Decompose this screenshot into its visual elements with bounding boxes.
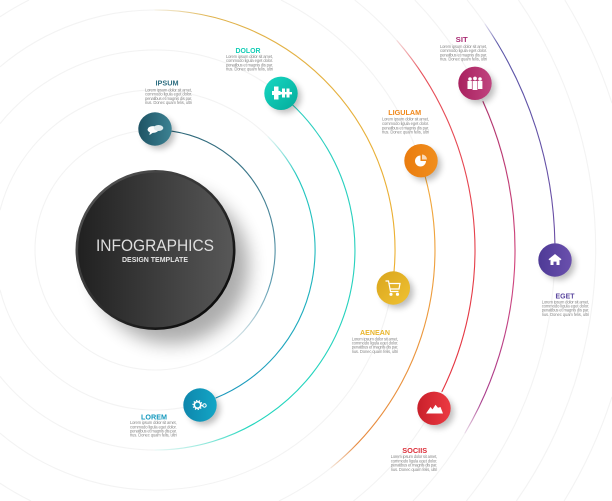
subtitle: design template: DESIGN TEMPLATE (122, 255, 188, 264)
icon: group of people (468, 77, 482, 90)
label: sit (440, 35, 487, 62)
label: dolor: commodo ligula eget dolor. (226, 58, 273, 63)
label: ligulam: commodo ligula eget dolor. (382, 121, 429, 126)
label: lorem: Lorem ipsum dolor sit amet, (130, 420, 177, 425)
icon: shopping cart (386, 281, 400, 295)
label: dolor (226, 46, 273, 72)
label: ipsum (145, 78, 192, 105)
label: dolor: rius. Donec quam felis, ultri (226, 67, 273, 72)
label: ligulam (382, 108, 429, 135)
label: eget: penatibus et magnis dis par. (542, 308, 589, 313)
label: aenean (352, 328, 398, 354)
label: aenean: commodo ligula eget dolor. (352, 340, 398, 345)
label: dolor: DOLOR (236, 46, 261, 55)
label: dolor: Lorem ipsum dolor sit amet, (226, 54, 273, 59)
label: lorem: commodo ligula eget dolor. (130, 424, 177, 429)
icon: chat bubbles (148, 125, 163, 135)
label: eget (542, 292, 589, 317)
label: lorem (130, 412, 177, 437)
central disc with title (77, 171, 249, 344)
label: lorem: rius. Donec quam felis, ultri (130, 432, 177, 437)
label: lorem: LOREM (141, 412, 167, 422)
label: ipsum: IPSUM (156, 78, 178, 88)
node: sit (458, 67, 495, 104)
label: sit: penatibus et magnis dis par. (440, 52, 487, 57)
node: ipsum (138, 112, 175, 149)
label: ligulam: LIGULAM (388, 108, 421, 117)
icon: puzzle pieces (272, 86, 292, 100)
title: infographics: INFOGRAPHICS (96, 237, 214, 255)
label: aenean: penatibus et magnis dis par. (352, 345, 398, 350)
label: sociis: rius. Donec quam felis, ultri (391, 467, 437, 472)
label: lorem: penatibus et magnis dis par. (130, 428, 177, 433)
icon: house (548, 254, 562, 265)
label: aenean: rius. Donec quam felis, ultri (352, 349, 398, 354)
label: ipsum: Lorem ipsum dolor sit amet, (145, 87, 192, 92)
label: ipsum: rius. Donec quam felis, ultri (145, 100, 192, 105)
label: sociis (391, 446, 437, 472)
label: sit: rius. Donec quam felis, ultri (440, 57, 487, 62)
label: aenean: Lorem ipsum dolor sit amet, (352, 336, 398, 341)
label: ligulam: rius. Donec quam felis, ultri (382, 130, 429, 135)
icon: pie chart (415, 154, 427, 166)
label: sit: commodo ligula eget dolor. (440, 48, 487, 53)
node: dolor (264, 77, 301, 113)
label: ligulam: penatibus et magnis dis par. (382, 125, 429, 130)
label: dolor: penatibus et magnis dis par. (226, 62, 273, 67)
node: eget (538, 243, 575, 280)
node: aenean (377, 271, 414, 308)
label: sit: SIT (456, 35, 468, 44)
coloured orbit arcs (155, 10, 555, 468)
node: ligulam (404, 144, 441, 181)
label: eget: EGET (556, 292, 575, 300)
node: lorem (183, 388, 220, 425)
label: sociis: SOCIIS (402, 446, 427, 455)
label: ipsum: penatibus et magnis dis par. (145, 96, 192, 101)
label: sit: Lorem ipsum dolor sit amet, (440, 44, 487, 49)
label: sociis: commodo ligula eget dolor. (391, 458, 437, 463)
icon: mountains (426, 405, 443, 414)
label: sociis: penatibus et magnis dis par. (391, 463, 437, 468)
label: eget: commodo ligula eget dolor. (542, 303, 589, 308)
label: eget: rius. Donec quam felis, ultri (542, 312, 589, 317)
node: sociis (417, 392, 454, 428)
label: ligulam: Lorem ipsum dolor sit amet, (382, 117, 429, 122)
label: eget: Lorem ipsum dolor sit amet, (542, 299, 589, 304)
icon: gears (193, 400, 206, 410)
label: sociis: Lorem ipsum dolor sit amet, (391, 454, 437, 459)
label: aenean: AENEAN (360, 328, 390, 337)
label: ipsum: commodo ligula eget dolor. (145, 92, 192, 97)
